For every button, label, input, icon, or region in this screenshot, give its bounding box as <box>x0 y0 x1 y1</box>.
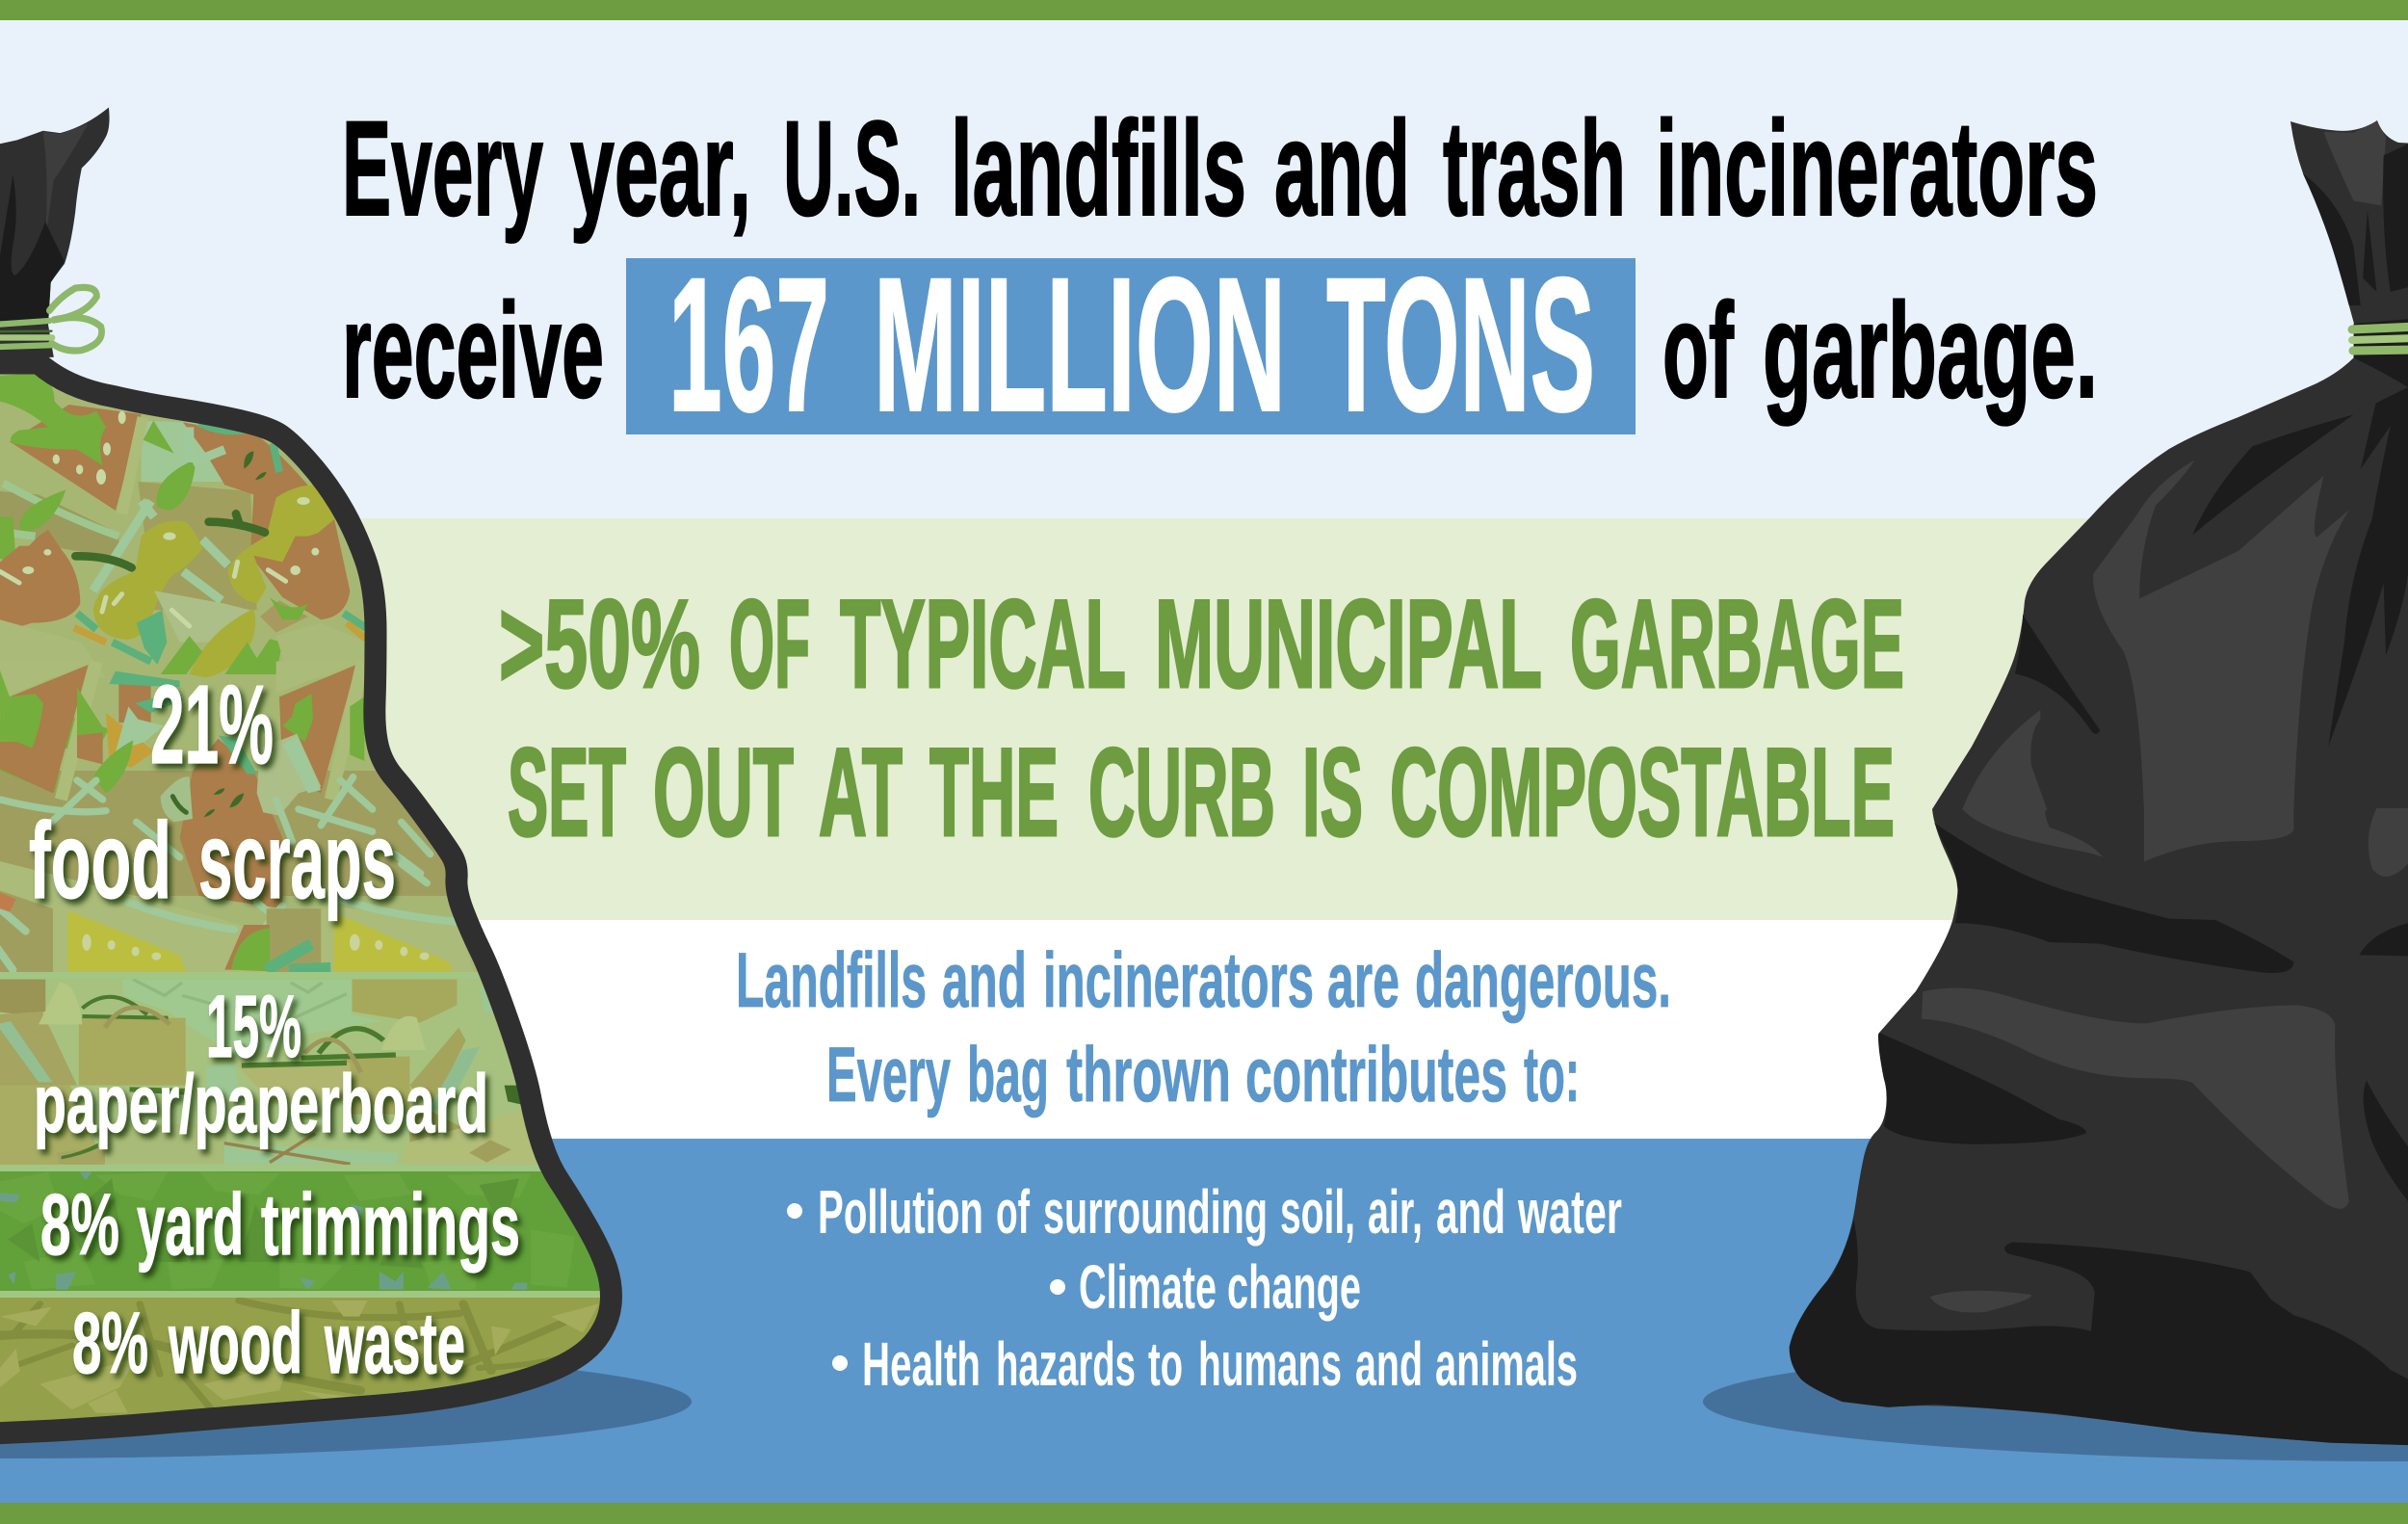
top green bar <box>0 0 2408 20</box>
danger statement <box>736 937 1671 1118</box>
label: yard trimmings: 8% <box>40 1177 119 1274</box>
effect: pollution: water <box>1517 1177 1622 1247</box>
danger statement: Landfills <box>736 937 927 1024</box>
compostable heading: OUT <box>653 722 794 862</box>
danger statement: incinerators <box>1043 937 1314 1024</box>
layer divider lines <box>0 972 626 1298</box>
label: wood waste: 8% <box>72 1296 148 1392</box>
wood waste layer <box>0 1298 600 1422</box>
label: paper <box>34 978 488 1150</box>
title words of garbage <box>1662 275 2098 426</box>
label: wood waste: waste <box>324 1296 465 1392</box>
compostable heading: MUNICIPAL <box>1155 573 1542 714</box>
title word receive: receive <box>342 275 604 426</box>
effect: climate: Climate <box>1079 1252 1217 1322</box>
effect: health: animals <box>1435 1329 1578 1399</box>
left bag green tie <box>0 287 102 351</box>
compostable heading: COMPOSTABLE <box>1390 722 1895 862</box>
title line one: trash <box>1443 92 1626 244</box>
icon: black garbage bag right <box>1790 120 2408 1446</box>
panel: compostable band <box>0 518 2408 920</box>
effect: climate: change <box>1227 1252 1361 1322</box>
title line one: incinerators <box>1656 92 2098 244</box>
effect: pollution <box>787 1177 1622 1247</box>
title line one: U.S. <box>783 92 921 244</box>
compostable heading: THE <box>929 722 1059 862</box>
effect: health: and <box>1355 1329 1423 1399</box>
compostable heading: SET <box>508 722 626 862</box>
danger statement: are <box>1327 937 1400 1024</box>
effect: pollution: soil, <box>1280 1177 1355 1247</box>
bottom green bar <box>0 1503 2408 1524</box>
danger statement: dangerous. <box>1415 937 1671 1024</box>
right bag green tie <box>2352 327 2408 351</box>
label: wood waste <box>72 1296 465 1392</box>
left bag neck <box>0 108 110 357</box>
compostable heading: OF <box>729 573 810 714</box>
left bag outline <box>0 363 611 1434</box>
compostable heading: CURB <box>1088 722 1275 862</box>
title line one: year, <box>570 92 751 244</box>
highlight box: TONS <box>1326 238 1595 451</box>
effect: pollution: of <box>996 1177 1030 1247</box>
compostable heading: GARBAGE <box>1570 573 1904 714</box>
label: food scraps: 21% <box>150 662 274 787</box>
danger statement: and <box>942 937 1027 1024</box>
danger statement: bag <box>967 1032 1049 1118</box>
title line one: Every <box>342 92 543 244</box>
panel: danger band <box>0 920 2408 1139</box>
effect: pollution: surrounding <box>1043 1177 1268 1247</box>
label: yard trimmings: yard <box>137 1177 244 1274</box>
right bag silhouette <box>1793 120 2408 1446</box>
compostable heading: IS <box>1302 722 1363 862</box>
title line one <box>342 92 2098 244</box>
effect: health: humans <box>1198 1329 1342 1399</box>
right bag lower folds <box>1790 808 2408 1445</box>
label: yard trimmings: trimmings <box>261 1177 520 1274</box>
right bag shadow <box>1703 1342 2408 1461</box>
compostable heading <box>499 573 1904 862</box>
danger statement: Every <box>826 1032 951 1118</box>
panel: effects band <box>0 1139 2408 1503</box>
label: wood waste: wood <box>168 1296 302 1392</box>
danger statement: thrown <box>1066 1032 1231 1118</box>
title words of garbage: of <box>1662 275 1734 426</box>
danger statement: to: <box>1524 1032 1580 1118</box>
title line one: landfills <box>951 92 1246 244</box>
label: paper: paper/paperboard <box>34 1059 488 1150</box>
effects list <box>787 1177 1622 1399</box>
effect: health: Health <box>862 1329 981 1399</box>
bag percentage labels <box>29 662 520 1392</box>
label: food scraps: food <box>29 801 171 921</box>
highlight box: MILLION <box>874 238 1286 451</box>
compostable heading: TYPICAL <box>840 573 1126 714</box>
icon: transparent garbage bag left <box>0 108 665 1448</box>
label: paper: 15% <box>206 978 301 1076</box>
effect: pollution: air, <box>1368 1177 1423 1247</box>
left bag contents <box>0 374 600 1422</box>
effect: pollution: and <box>1436 1177 1505 1247</box>
effect: health <box>832 1329 1578 1399</box>
title <box>342 92 2098 451</box>
label: yard trimmings <box>40 1177 520 1274</box>
label: food scraps: scraps <box>198 801 396 921</box>
label: food scraps <box>29 662 396 921</box>
food scraps layer <box>0 373 475 976</box>
compostable heading: >50% <box>499 573 700 714</box>
compostable heading: AT <box>819 722 903 862</box>
yard trimmings layer <box>0 1170 635 1293</box>
left bag shadow <box>0 1345 692 1458</box>
paper and paperboard layer <box>0 979 557 1166</box>
title words of garbage: garbage. <box>1763 275 2098 426</box>
right bag upper folds <box>1962 121 2408 810</box>
effect: health: to <box>1148 1329 1183 1399</box>
highlight box: 167 <box>668 238 829 451</box>
effect: health: hazards <box>996 1329 1136 1399</box>
danger statement: contributes <box>1245 1032 1507 1118</box>
title line one: and <box>1274 92 1410 244</box>
effect: pollution: Pollution <box>818 1177 983 1247</box>
